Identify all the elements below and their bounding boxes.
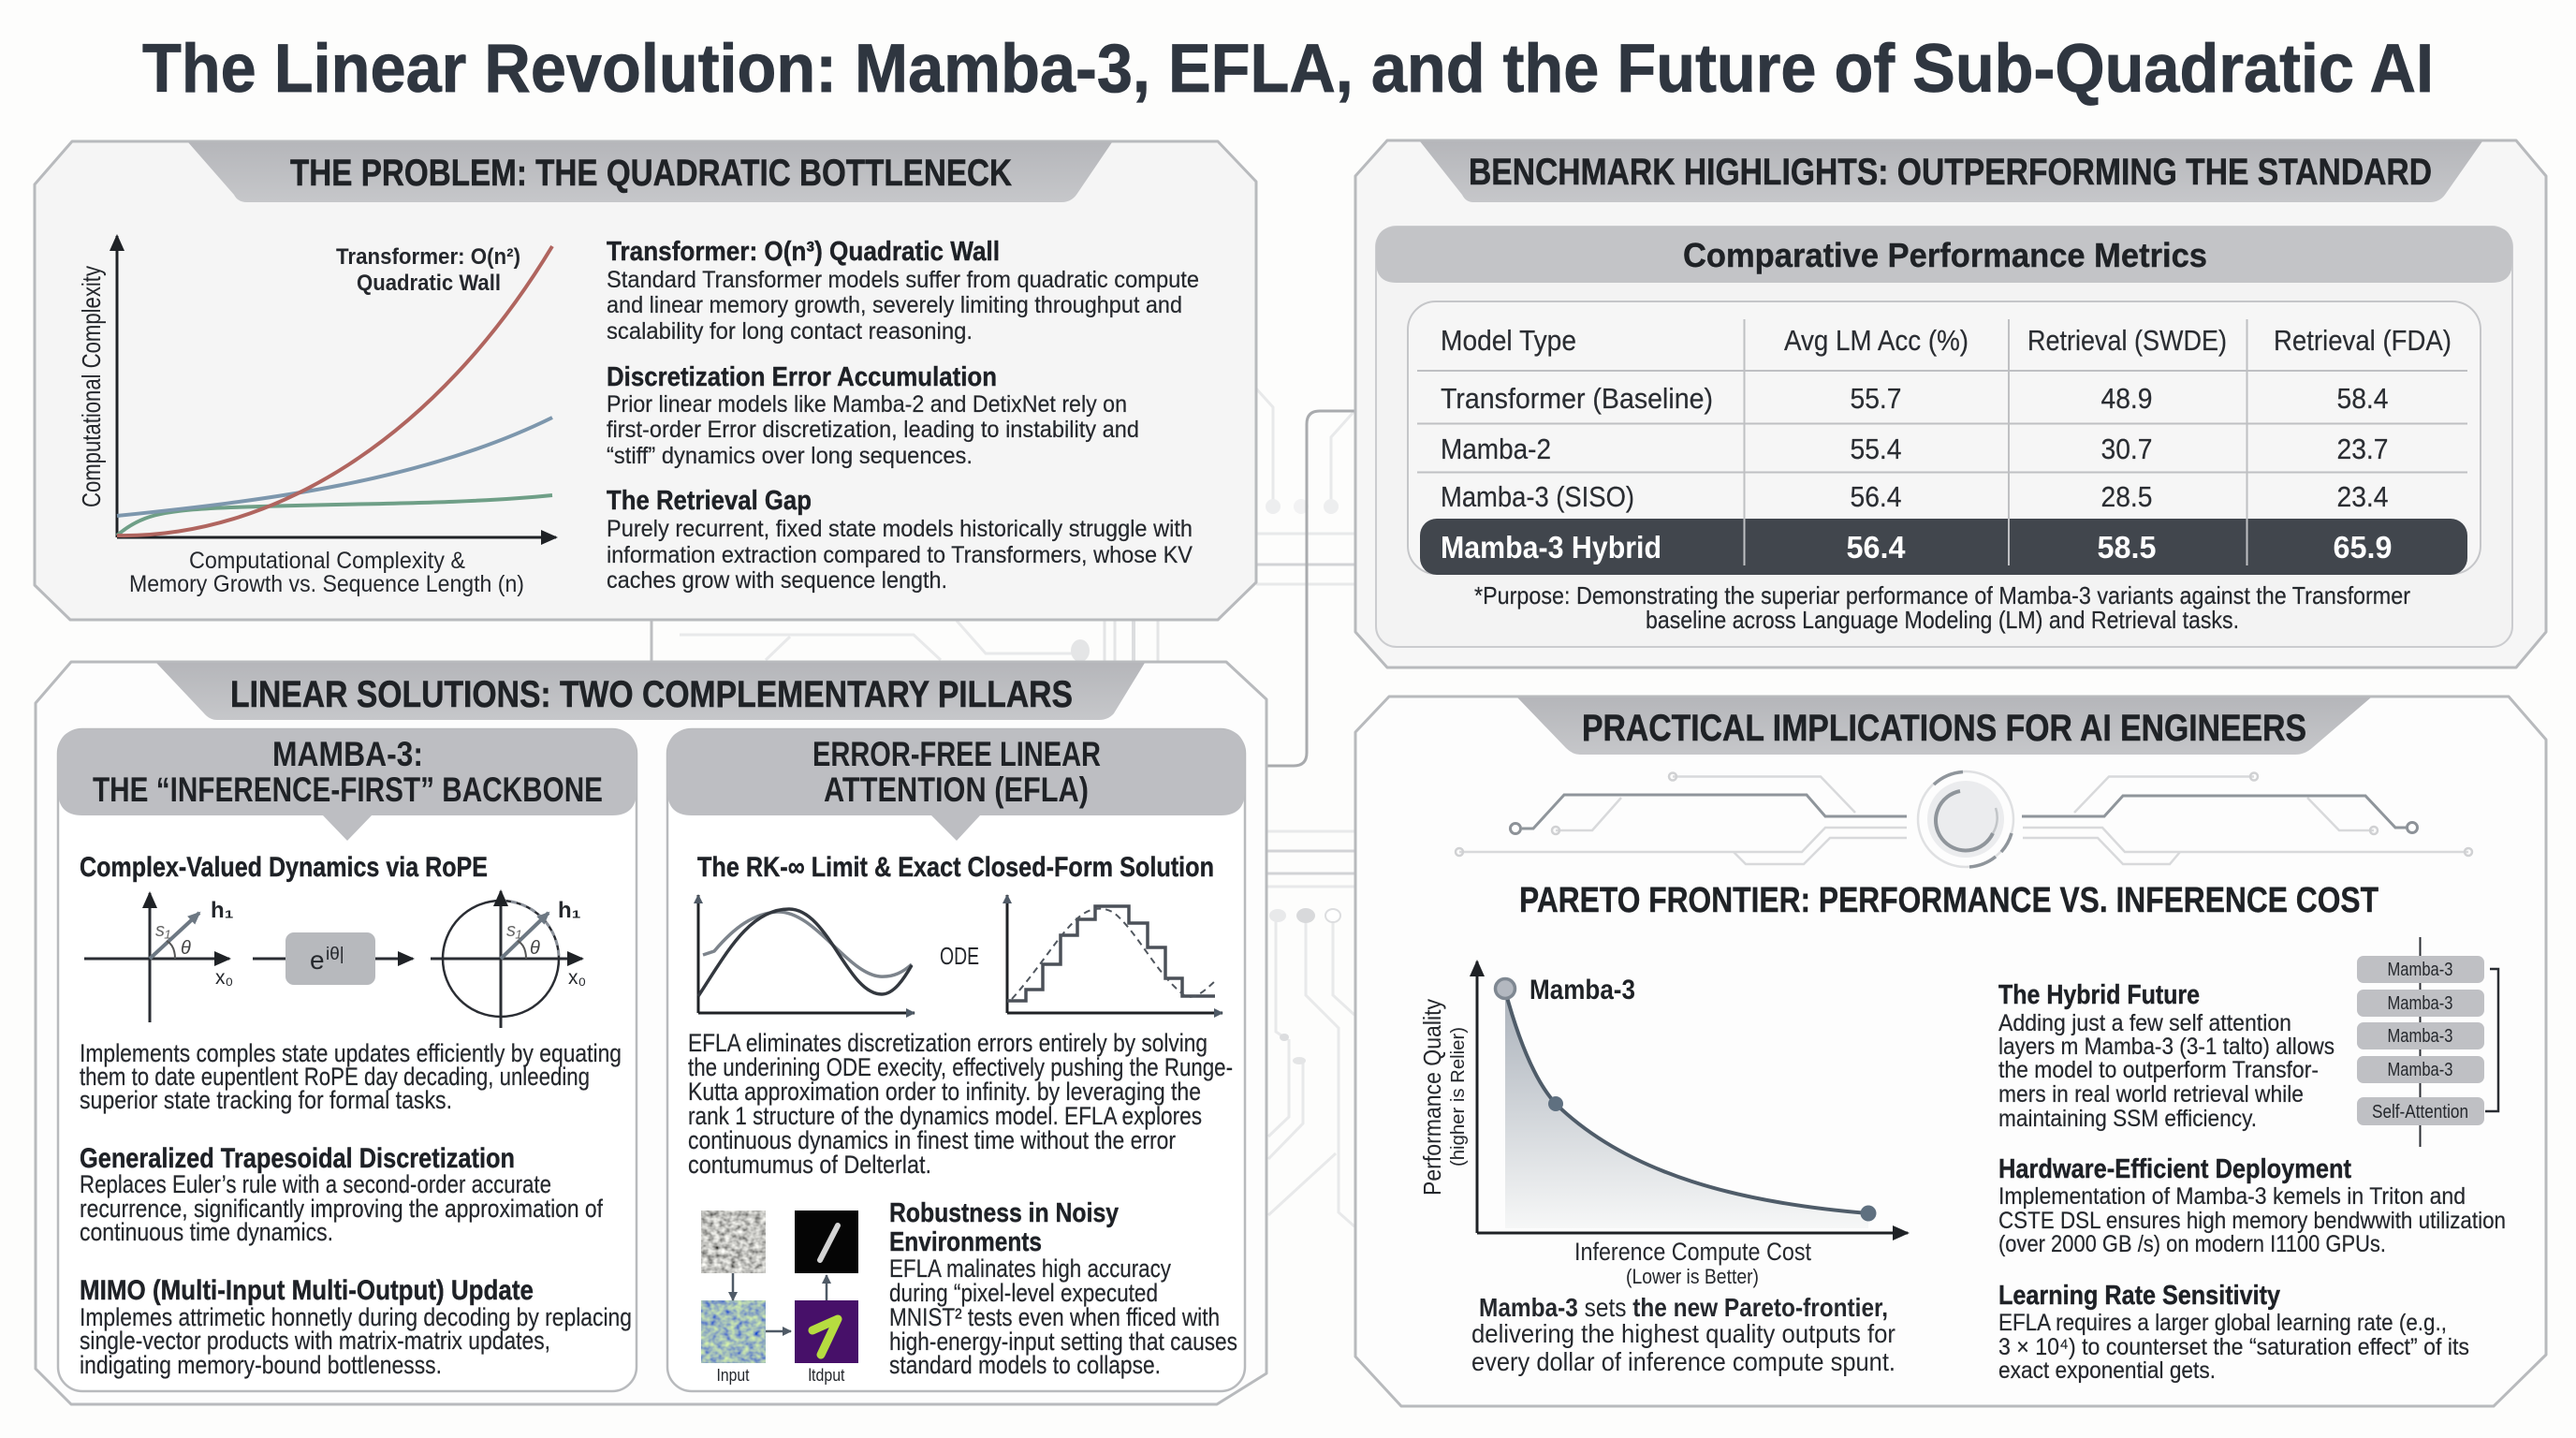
table: performance metrics xyxy=(1408,301,2481,575)
diagram: hybrid layer stack: Mamba-3 xyxy=(2387,1060,2452,1080)
diagram: complex rotation: s₁ xyxy=(506,920,521,941)
panel: benchmark highlights xyxy=(1355,140,2546,668)
subheading: complex-valued dynamics: Complex-Valued Dynamics via RoPE xyxy=(80,852,488,883)
table: performance metrics: 23.7 xyxy=(2336,433,2389,465)
text: hybrid future: layers m Mamba-3 (3-1 talto) allows xyxy=(1998,1034,2334,1060)
text: rope description: them to date eupentlent RoPE day decading, unleeding xyxy=(80,1063,590,1091)
text: mimo update: single-vector products with matrix-matrix updates, xyxy=(80,1327,550,1355)
heading: comparative performance metrics xyxy=(1376,227,2512,283)
text: rope description: Implements comples state updates efficiently by equating xyxy=(80,1039,622,1067)
text: rope description: superior state tracking for formal tasks. xyxy=(80,1086,452,1114)
chart: complexity growth curves: Computational Complexity xyxy=(77,266,106,507)
text: discretization error xyxy=(607,362,1139,469)
text: rope description xyxy=(80,1039,622,1114)
text: mimo update: MIMO (Multi-Input Multi-Output) Update xyxy=(80,1275,534,1306)
text: mimo update: indigating memory-bound bottlenesss. xyxy=(80,1351,442,1379)
table: performance metrics: 55.7 xyxy=(1850,382,1902,415)
text: robustness: during “pixel-level expecuted xyxy=(889,1279,1158,1307)
chart: pareto curve: (higher is Relier) xyxy=(1448,1027,1469,1167)
heading: the problem: THE PROBLEM: THE QUADRATIC BOTTLENECK xyxy=(290,153,1012,194)
chart: stepped discretization xyxy=(1007,895,1222,1013)
panel: practical implications xyxy=(1355,697,2546,1406)
card: mamba-3 xyxy=(58,729,637,1391)
connector between solutions panel and benchmark panel xyxy=(1266,411,1355,766)
text: discretization error: first-order Error discretization, leading to instability and xyxy=(607,417,1139,443)
text: generalized trapezoidal discretization: recurrence, significantly improving the approximation of xyxy=(80,1195,604,1223)
text: pareto summary xyxy=(1471,1293,1895,1376)
table: performance metrics: Transformer (Baseline) xyxy=(1441,382,1713,415)
text: efla description: EFLA eliminates discretization errors entirely by solving xyxy=(688,1029,1208,1057)
table: performance metrics: 28.5 xyxy=(2100,480,2153,513)
table: performance metrics: 55.4 xyxy=(1850,433,1902,465)
text: generalized trapezoidal discretization: Replaces Euler’s rule with a second-order accurate xyxy=(80,1170,551,1198)
text: pareto summary: Mamba-3 sets the new Pareto-frontier, xyxy=(1479,1293,1888,1322)
diagram: complex rotation xyxy=(84,891,586,1028)
heading: practical implications xyxy=(1517,697,2371,755)
text: learning rate sensitivity: Learning Rate Sensitivity xyxy=(1998,1281,2280,1311)
footnote: purpose: *Purpose: Demonstrating the superiar performance of Mamba-3 variants against the Transformer xyxy=(1474,581,2410,609)
text: retrieval gap xyxy=(607,486,1193,594)
card header: mamba-3: MAMBA-3: xyxy=(272,735,423,773)
text: learning rate sensitivity: EFLA requires a larger global learning rate (e.g., xyxy=(1998,1310,2447,1336)
text: quadratic wall: Transformer: O(n³) Quadratic Wall xyxy=(607,237,1000,267)
table: performance metrics: Mamba-2 xyxy=(1441,433,1551,465)
diagram: complex rotation: e xyxy=(310,946,325,975)
chart: pareto curve: Inference Compute Cost xyxy=(1574,1238,1811,1266)
diagram: complex rotation: θ xyxy=(181,938,191,959)
text: generalized trapezoidal discretization: continuous time dynamics. xyxy=(80,1218,333,1246)
table: performance metrics: Retrieval (SWDE) xyxy=(2027,324,2227,357)
text: quadratic wall: and linear memory growth, severely limiting throughput and xyxy=(607,292,1182,318)
diagram: complex rotation: iθ| xyxy=(326,945,344,964)
text: generalized trapezoidal discretization xyxy=(80,1143,604,1246)
highlighted row: mamba-3 hybrid: 56.4 xyxy=(1846,530,1906,565)
text: hardware-efficient deployment: (over 2000 GB /s) on modern I1100 GPUs. xyxy=(1998,1231,2386,1257)
text: robustness xyxy=(889,1198,1237,1379)
text: discretization error: Discretization Error Accumulation xyxy=(607,362,997,392)
diagram: hybrid layer stack: Mamba-3 xyxy=(2387,960,2452,980)
panel: linear solutions xyxy=(36,662,1266,1404)
inner card: comparative metrics xyxy=(1376,227,2512,647)
heading: linear solutions: LINEAR SOLUTIONS: TWO COMPLEMENTARY PILLARS xyxy=(230,674,1073,715)
text: hardware-efficient deployment: CSTE DSL ensures high memory bendwwith utilization xyxy=(1998,1208,2506,1234)
table: performance metrics: Mamba-3 (SISO) xyxy=(1441,480,1634,513)
text: efla description: contumumus of Delterlat. xyxy=(688,1151,931,1179)
footnote: purpose xyxy=(1474,581,2410,634)
text: learning rate sensitivity: 3 × 10⁴) to counterset the “saturation effect” of its xyxy=(1998,1334,2469,1360)
text: hybrid future: mers in real world retrieval while xyxy=(1998,1081,2304,1108)
highlighted row: mamba-3 hybrid xyxy=(1420,519,2467,575)
figure: noisy mnist input and output: ltdput xyxy=(809,1366,844,1385)
text: robustness: EFLA malinates high accuracy xyxy=(889,1255,1172,1283)
text: retrieval gap: caches grow with sequence length. xyxy=(607,567,947,594)
chart: pareto curve: Performance Quality xyxy=(1418,999,1446,1196)
heading: the problem xyxy=(188,142,1112,202)
highlighted row: mamba-3 hybrid: 58.5 xyxy=(2097,530,2157,565)
table: performance metrics: 56.4 xyxy=(1850,480,1902,513)
background circuit traces xyxy=(651,389,1355,1226)
text: robustness: Robustness in Noisy xyxy=(889,1198,1119,1228)
diagram: hybrid layer stack: Mamba-3 xyxy=(2387,993,2452,1014)
diagram: hybrid layer stack xyxy=(2357,937,2498,1147)
heading: linear solutions xyxy=(156,663,1145,720)
icon: circuit emblem xyxy=(1456,771,2472,867)
diagram: complex rotation: h₁ xyxy=(211,898,234,923)
table: performance metrics: 58.4 xyxy=(2336,382,2389,415)
chart: complexity growth curves: Memory Growth vs. Sequence Length (n) xyxy=(129,571,524,597)
text: hybrid future: The Hybrid Future xyxy=(1998,980,2200,1010)
text: quadratic wall: scalability for long contact reasoning. xyxy=(607,318,973,345)
text: hybrid future: maintaining SSM efficiency. xyxy=(1998,1106,2257,1132)
card header: mamba-3 xyxy=(58,729,637,841)
chart: continuous solution curves xyxy=(698,895,915,1013)
text: efla description: Kutta approximation order to infinity. by leveraging the xyxy=(688,1078,1201,1106)
text: hardware-efficient deployment: Hardware-Efficient Deployment xyxy=(1998,1154,2351,1184)
text: pareto summary: delivering the highest quality outputs for xyxy=(1471,1319,1895,1348)
card: efla xyxy=(667,729,1245,1391)
table: performance metrics: Retrieval (FDA) xyxy=(2274,324,2452,357)
text: efla description: rank 1 structure of the dynamics model. EFLA explores xyxy=(688,1102,1202,1130)
text: hybrid future: Adding just a few self attention xyxy=(1998,1010,2291,1036)
heading: benchmark highlights xyxy=(1420,141,2482,202)
text: learning rate sensitivity: exact exponential gets. xyxy=(1998,1357,2216,1384)
diagram: hybrid layer stack: Self-Attention xyxy=(2372,1102,2468,1123)
chart: complexity growth curves: Quadratic Wall xyxy=(357,271,501,296)
text: discretization error: Prior linear models like Mamba-2 and DetixNet rely on xyxy=(607,391,1127,418)
text: quadratic wall xyxy=(607,237,1199,345)
text: efla description: continuous dynamics in finest time without the error xyxy=(688,1126,1176,1154)
heading: practical implications: PRACTICAL IMPLICATIONS FOR AI ENGINEERS xyxy=(1582,708,2306,749)
diagram: complex rotation: h₁ xyxy=(558,898,581,923)
diagram: complex rotation: x₀ xyxy=(568,967,586,989)
text: hybrid future: the model to outperform Transfor- xyxy=(1998,1057,2319,1083)
chart: complexity growth curves: Transformer: O(n²) xyxy=(336,244,520,270)
text: mimo update xyxy=(80,1275,632,1379)
text: retrieval gap: information extraction compared to Transformers, whose KV xyxy=(607,542,1193,568)
text: robustness: Environments xyxy=(889,1227,1042,1257)
text: quadratic wall: Standard Transformer models suffer from quadratic compute xyxy=(607,267,1199,293)
text: robustness: MNIST² tests even when fficed with xyxy=(889,1303,1220,1331)
table: performance metrics: Avg LM Acc (%) xyxy=(1784,324,1969,357)
card header: efla xyxy=(667,729,1245,841)
chart: pareto curve: (Lower is Better) xyxy=(1626,1265,1759,1288)
card header: efla: ATTENTION (EFLA) xyxy=(824,770,1089,809)
figure: noisy mnist input and output xyxy=(701,1211,858,1385)
chart: complexity growth curves xyxy=(77,236,556,597)
table: performance metrics: 48.9 xyxy=(2100,382,2153,415)
card header: mamba-3: THE “INFERENCE-FIRST” BACKBONE xyxy=(93,770,603,809)
chart: complexity growth curves: Computational Complexity & xyxy=(189,548,465,574)
text: hybrid future xyxy=(1998,980,2334,1132)
subheading: pareto frontier: PARETO FRONTIER: PERFORMANCE VS. INFERENCE COST xyxy=(1519,881,2378,920)
panel: the problem xyxy=(35,141,1256,620)
diagram: complex rotation: θ xyxy=(530,938,540,959)
text: pareto summary: every dollar of inference compute spunt. xyxy=(1471,1347,1895,1376)
chart: pareto curve xyxy=(1418,961,1908,1288)
chart: pareto curve: Mamba-3 xyxy=(1530,975,1635,1005)
text: robustness: high-energy-input setting that causes xyxy=(889,1328,1237,1356)
text: robustness: standard models to collapse. xyxy=(889,1351,1161,1379)
diagram: complex rotation: x₀ xyxy=(215,967,233,989)
text: mimo update: Implemes attrimetic honnetly during decoding by replacing xyxy=(80,1303,632,1331)
text: discretization error: “stiff” dynamics over long sequences. xyxy=(607,443,973,469)
highlighted row: mamba-3 hybrid: Mamba-3 Hybrid xyxy=(1441,530,1661,565)
diagram: complex rotation: s₁ xyxy=(155,920,170,941)
card header: efla: ERROR-FREE LINEAR xyxy=(812,735,1101,773)
label: ode: ODE xyxy=(940,942,979,970)
highlighted row: mamba-3 hybrid: 65.9 xyxy=(2333,530,2393,565)
text: hardware-efficient deployment xyxy=(1998,1154,2506,1257)
text: retrieval gap: The Retrieval Gap xyxy=(607,486,812,516)
table: performance metrics: 30.7 xyxy=(2100,433,2153,465)
table: performance metrics: Model Type xyxy=(1441,324,1576,357)
text: generalized trapezoidal discretization: Generalized Trapesoidal Discretization xyxy=(80,1143,515,1174)
title: The Linear Revolution: Mamba-3, EFLA, and the Future of Sub-Quadratic AI xyxy=(142,31,2434,107)
text: efla description xyxy=(688,1029,1233,1179)
table: performance metrics: 23.4 xyxy=(2336,480,2389,513)
heading: comparative performance metrics: Comparative Performance Metrics xyxy=(1683,236,2207,274)
text: retrieval gap: Purely recurrent, fixed state models historically struggle with xyxy=(607,516,1193,542)
diagram: hybrid layer stack: Mamba-3 xyxy=(2387,1026,2452,1047)
text: efla description: the underining ODE execity, effectively pushing the Runge- xyxy=(688,1053,1233,1081)
text: learning rate sensitivity xyxy=(1998,1281,2469,1384)
figure: noisy mnist input and output: Input xyxy=(717,1366,749,1385)
subheading: rk limit: The RK-∞ Limit & Exact Closed-Form Solution xyxy=(697,852,1214,883)
text: hardware-efficient deployment: Implementation of Mamba-3 kemels in Triton and xyxy=(1998,1183,2466,1210)
footnote: purpose: baseline across Language Modeling (LM) and Retrieval tasks. xyxy=(1646,606,2239,634)
